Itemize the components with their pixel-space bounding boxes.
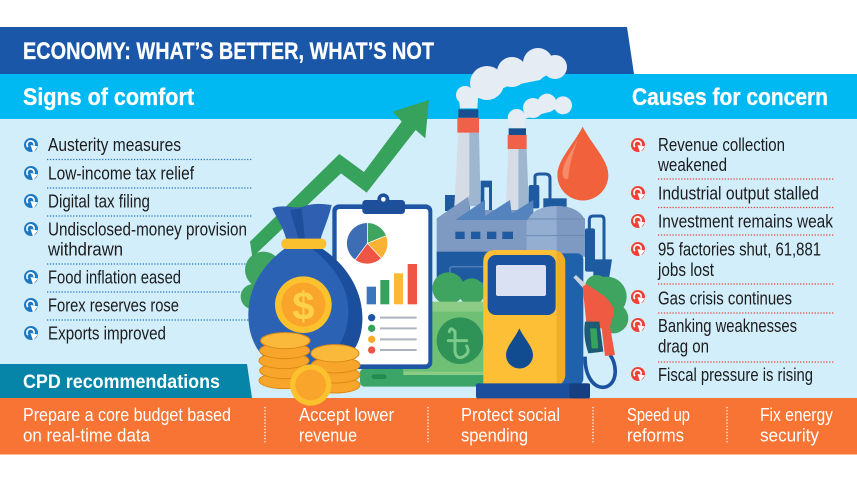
icon: oil drop [557, 127, 608, 200]
recommendation 1: Prepare a core budget based [23, 404, 231, 425]
title: ECONOMY: WHAT’S BETTER, WHAT’S NOT [23, 38, 434, 65]
recommendation 2: Accept lower [299, 404, 394, 425]
bar chart [367, 264, 417, 304]
icon: fuel pump [476, 250, 615, 398]
icon: banknote [360, 302, 490, 387]
recommendation 1 [23, 404, 231, 446]
panel: light blue background [0, 118, 857, 399]
panel: CPD recommendations band [0, 364, 252, 398]
recommendation texts [23, 404, 834, 446]
chimneys [454, 133, 469, 206]
dollar coin [275, 276, 332, 333]
concern items [657, 134, 834, 385]
icon: factory [437, 48, 612, 285]
recommendation 4: reforms [627, 424, 684, 446]
recommendation 2 [299, 404, 394, 446]
concern items: Industrial output stalled [658, 182, 819, 204]
concern items: Revenue collection [658, 134, 785, 155]
bullets: red arrows [631, 138, 645, 382]
bullets: blue arrows [24, 138, 38, 340]
icon: money bag: $ [292, 284, 314, 328]
taka symbol [437, 317, 483, 364]
recommendation 5: security [760, 424, 820, 446]
recommendation 1: on real-time data [23, 424, 151, 446]
icon: clipboard with charts [332, 193, 432, 369]
panel: causes for concern list [631, 134, 834, 385]
factory building [437, 197, 533, 257]
icon: center and right bushes [432, 272, 628, 333]
concern items: 95 factories shut, 61,881 [658, 238, 821, 260]
recommendation 2: revenue [299, 424, 357, 446]
concern items: drag on [658, 336, 709, 356]
heading: causes for concern: Causes for concern [632, 84, 828, 111]
comfort items [47, 134, 247, 344]
heading: CPD recommendations: CPD recommendations [23, 372, 220, 393]
comfort items: Digital tax filing [48, 190, 150, 212]
comfort items: Undisclosed-money provision [48, 218, 247, 240]
pie chart [347, 223, 388, 264]
concern items: Banking weaknesses [658, 315, 797, 336]
recommendation 3 [461, 404, 560, 446]
icon: money bag [248, 204, 362, 367]
section header band [0, 74, 857, 119]
legend [368, 314, 417, 354]
recommendation 4: Speed up [627, 404, 690, 425]
nozzle [573, 275, 587, 288]
comfort items: Exports improved [48, 322, 166, 344]
icon: coin stacks [259, 333, 360, 406]
comfort items: Low-income tax relief [48, 162, 195, 184]
recommendation 3: spending [461, 424, 528, 446]
concern items: weakened [657, 154, 727, 175]
concern items: Gas crisis continues [658, 288, 792, 308]
recommendation 5: Fix energy [760, 404, 834, 425]
comfort items: withdrawn [47, 238, 123, 260]
comfort items: Food inflation eased [48, 266, 181, 288]
heading: signs of comfort: Signs of comfort [23, 84, 194, 111]
recommendation 5 [760, 404, 834, 446]
hose [585, 355, 615, 387]
recommendation 4 [627, 404, 690, 446]
panel: signs of comfort list [24, 134, 252, 344]
comfort items: Austerity measures [48, 134, 181, 155]
concern items: jobs lost [657, 259, 714, 280]
icon: left bush [241, 252, 282, 309]
smoke clouds [456, 48, 572, 128]
recommendation 3: Protect social [461, 404, 560, 425]
pipes and tanks [535, 174, 550, 203]
comfort items: Forex reserves rose [48, 294, 179, 316]
illustration [241, 48, 628, 406]
concern items: Fiscal pressure is rising [658, 364, 813, 385]
panel: orange recommendations band [0, 398, 857, 454]
storage tank [527, 206, 585, 257]
icon: rising green arrow [250, 100, 429, 257]
title band [0, 27, 634, 74]
